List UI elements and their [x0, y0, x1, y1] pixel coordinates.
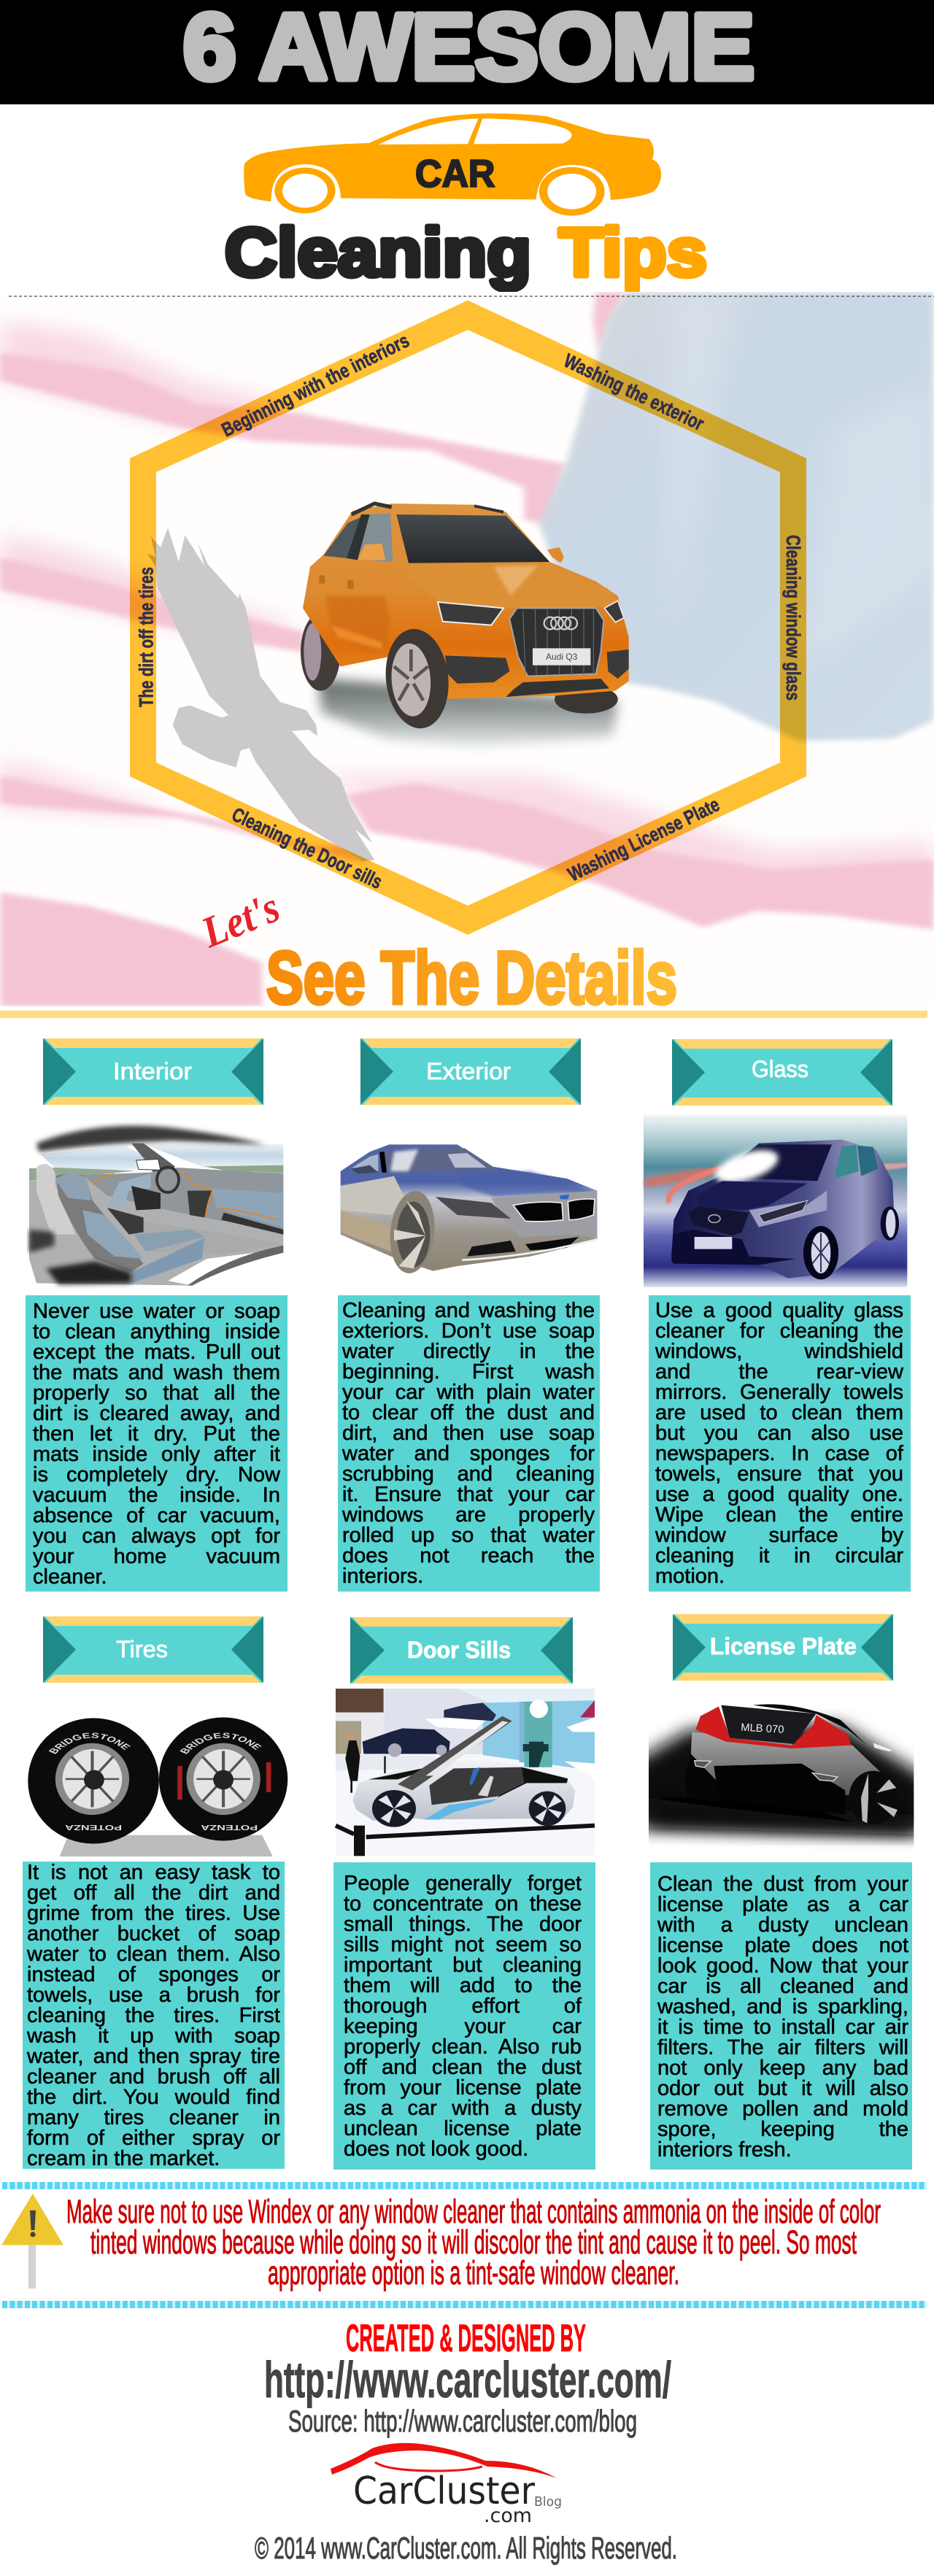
hexagon step labels: Beginning with the interiors [218, 329, 413, 441]
text: Tires tips: towels, use a brush for [27, 1983, 280, 2007]
illustration: BMW i8 at auto show [334, 1689, 595, 1856]
text: Glass tips: cleaner for cleaning the [655, 1319, 903, 1343]
illustration: Volvo rear with license plate [649, 1704, 914, 1848]
text: Exterior tips: exteriors. Don’t use soap [342, 1319, 595, 1343]
text: Interior tips: cleaner. [33, 1565, 107, 1589]
text: Interior tips: properly so that all the [33, 1381, 280, 1405]
text: Interior tips: vacuum the inside. In [33, 1484, 280, 1507]
text: Tires tips: many tires cleaner in [27, 2106, 280, 2129]
banner: Door Sills: Door Sills [407, 1637, 511, 1663]
icon: warning sign [1, 2194, 63, 2288]
illustration: two racing tires: BRIDGESTONE [180, 1732, 261, 1754]
illustration: blue Datsun sketch [642, 1115, 908, 1287]
text: Door Sills tips: small things. The door [344, 1913, 582, 1936]
text: Door Sills tips [344, 1872, 582, 2161]
illustration: orange Audi Q3: Audi Q3 [546, 652, 578, 662]
text: Interior tips: then let it dry. Put the [33, 1422, 280, 1446]
text: Glass tips: motion. [655, 1565, 725, 1588]
header band: 6 AWESOME [0, 0, 934, 104]
text: License Plate tips: filters. The air filters will [657, 2036, 908, 2059]
logo: CarCluster [331, 2443, 562, 2527]
text: License Plate tips: spore, keeping the [657, 2118, 908, 2141]
text: Door Sills tips: sills might not seem so [344, 1933, 582, 1956]
text: Exterior tips: to clear off the dust and [342, 1401, 595, 1424]
text: Door Sills tips: unclean license plate [344, 2117, 582, 2140]
illustration: two racing tires [28, 1717, 287, 1856]
text: Door Sills tips: does not look good. [344, 2137, 528, 2161]
text box: Glass [649, 1295, 911, 1592]
text: Tires tips [26, 1861, 280, 2170]
hexagon step labels: The dirt off the tires [135, 567, 157, 707]
logo: CarCluster: Blog [534, 2494, 562, 2510]
text: Interior tips: your home vacuum [33, 1545, 280, 1568]
text: Glass tips: window surface by [655, 1524, 903, 1547]
illustration: two racing tires: BRIDGESTONE [48, 1732, 131, 1754]
text: Interior tips: except the mats. Pull out [33, 1341, 280, 1364]
banner: License Plate [673, 1614, 893, 1681]
text: License Plate tips: odor out but it will also [657, 2077, 908, 2100]
panel: hero with flag, hexagon and car [0, 292, 934, 1018]
text: Exterior tips: interiors. [342, 1565, 423, 1588]
flag background [0, 292, 934, 1006]
text box: Interior [26, 1295, 287, 1592]
hexagon step labels: Washing the exterior [560, 350, 708, 435]
text: Door Sills tips: off and clean the dust [344, 2056, 582, 2079]
banner: Interior: Interior [113, 1058, 192, 1084]
dashed rule [9, 296, 934, 297]
illustration: car interior sketch [26, 1121, 283, 1289]
text box: Door Sills [333, 1862, 595, 2170]
text: Tires tips: form of either spray or [27, 2126, 280, 2150]
text: Interior tips: dirt is cleared away, and [33, 1402, 280, 1425]
text: Exterior tips: windows are properly [342, 1503, 595, 1527]
text: Tires tips: another bucket of soap [27, 1922, 280, 1946]
text: Exterior tips: does not reach the [342, 1544, 595, 1567]
text: Glass tips: use a good quality one. [655, 1483, 903, 1506]
logo: CarCluster: .com [484, 2504, 532, 2527]
text: Tires tips: cream in the market. [27, 2147, 220, 2170]
text: License Plate tips: with a dusty unclean [657, 1913, 908, 1937]
warning text [66, 2193, 881, 2291]
hexagon step labels: Washing License Plate [565, 793, 723, 886]
text: Glass tips: are used to clean them [655, 1401, 903, 1424]
text: Glass tips: cleaning it in circular [655, 1544, 903, 1567]
text: Door Sills tips: to concentrate on these [344, 1892, 582, 1916]
banner: Door Sills [350, 1617, 573, 1684]
text: Exterior tips: dirt, and then use soap [342, 1422, 595, 1445]
text: Glass tips: but you can also use [655, 1422, 903, 1445]
text: Glass tips: mirrors. Generally towels [655, 1381, 903, 1404]
text: Exterior tips: it. Ensure that your car [342, 1483, 595, 1506]
text: Door Sills tips: thorough effort of [344, 1994, 582, 2018]
text: License Plate tips: not only keep any bad [657, 2056, 908, 2080]
text: Glass tips [655, 1299, 903, 1588]
illustration: two racing tires: POTENZA [65, 1824, 122, 1832]
text box: Exterior [338, 1295, 600, 1592]
illustration: orange Audi Q3 [301, 501, 629, 750]
text: Exterior tips: beginning. First wash [342, 1360, 595, 1384]
banner: Exterior: Exterior [426, 1058, 511, 1084]
text: Door Sills tips: them will add to the [344, 1974, 582, 1997]
hexagon frame [130, 301, 806, 935]
text: Tires tips: water, and then spray tire [27, 2045, 280, 2068]
text box: License Plate [650, 1862, 912, 2170]
text: Tires tips: instead of sponges or [27, 1963, 280, 1986]
text: Exterior tips: Cleaning and washing the [342, 1299, 595, 1322]
text: Door Sills tips: keeping your car [344, 2015, 582, 2038]
text: Glass tips: Wipe clean the entire [655, 1503, 903, 1527]
text: Tires tips: water to clean them. Also [27, 1943, 280, 1966]
illustration: two racing tires: POTENZA [201, 1824, 258, 1832]
text: License Plate tips: Clean the dust from your [657, 1873, 908, 1896]
banner: Exterior [360, 1038, 581, 1105]
text box: Tires [23, 1862, 285, 2169]
text: License Plate tips: license plate as a car [657, 1893, 908, 1916]
text: Tires tips: cleaning the tires. First [27, 2004, 280, 2027]
text: Exterior tips [341, 1299, 595, 1588]
text: Glass tips: Use a good quality glass [655, 1299, 903, 1322]
text: Interior tips: mats inside only after it [33, 1443, 280, 1466]
text: License Plate tips [657, 1873, 909, 2162]
title: Cleaning Tips [225, 219, 707, 292]
text: License Plate tips: interiors fresh. [657, 2138, 792, 2162]
text: License Plate tips: it is time to install car air [657, 2016, 908, 2039]
text: Glass tips: towels, ensure that you [655, 1462, 903, 1486]
text: Interior tips [32, 1300, 280, 1589]
text: Exterior tips: rolled up so that water [342, 1524, 595, 1547]
banner: Glass [672, 1039, 892, 1106]
warning top rule [2, 2182, 927, 2189]
divider bar [0, 1011, 927, 1018]
text: Interior tips: you can always opt for [33, 1524, 280, 1548]
logo: orange car with CAR label: CAR [415, 152, 495, 195]
text: Glass tips: windows, windshield [655, 1340, 903, 1363]
text: Door Sills tips: important but cleaning [344, 1954, 582, 1977]
text: Exterior tips: water and sponges for [342, 1442, 595, 1465]
text: Door Sills tips: from your license plate [344, 2076, 582, 2099]
text: Door Sills tips: as a car with a dusty [344, 2097, 582, 2120]
text: Exterior tips: water directly in the [342, 1340, 595, 1363]
text: Tires tips: cleaner and brush off all [27, 2065, 280, 2089]
banner: Interior [43, 1038, 263, 1105]
text: Door Sills tips: People generally forget [344, 1872, 582, 1895]
text: License Plate tips: look good. Now that your [657, 1954, 908, 1978]
text: Tires tips: get off all the dirt and [27, 1881, 280, 1905]
text: License Plate tips: license plate does not [657, 1934, 908, 1957]
text: License Plate tips: remove pollen and mold [657, 2097, 908, 2121]
text: Interior tips: to clean anything inside [33, 1320, 280, 1343]
text: License Plate tips: car is all cleaned and [657, 1975, 908, 1998]
banner: Tires: Tires [116, 1636, 168, 1662]
banner: Tires [43, 1616, 263, 1683]
text: Interior tips: Never use water or soap [33, 1300, 280, 1323]
text: Interior tips: is completely dry. Now [33, 1463, 280, 1486]
text: Exterior tips: your car with plain water [342, 1381, 595, 1404]
logo: CarCluster: CarCluster [353, 2469, 536, 2513]
illustration: Volvo rear with license plate: MLB 070 [741, 1722, 784, 1736]
hexagon step labels [135, 329, 804, 893]
text: Tires tips: It is not an easy task to [27, 1861, 280, 1884]
text: Door Sills tips: properly clean. Also rub [344, 2035, 582, 2059]
hexagon step labels: Cleaning window glass [782, 535, 804, 701]
illustration: silver BMW sketch [340, 1144, 597, 1273]
text: Tires tips: the dirt. You would find [27, 2086, 280, 2109]
logo: orange car with CAR label [244, 113, 661, 216]
text: Glass tips: newspapers. In case of [655, 1442, 903, 1465]
warning bottom rule [2, 2301, 927, 2308]
text: Tires tips: wash it up with soap [27, 2024, 280, 2048]
text: Interior tips: the mats and wash them [33, 1361, 280, 1384]
text: Interior tips: absence of car vacuum, [33, 1504, 280, 1527]
text: License Plate tips: washed, and is sparkling, [657, 1995, 908, 2018]
hexagon step labels: Cleaning the Door sills [228, 803, 385, 893]
text: Glass tips: and the rear-view [655, 1360, 903, 1384]
banner: Glass: Glass [752, 1056, 808, 1082]
text: Tires tips: grime from the tires. Use [27, 1902, 280, 1925]
banner: License Plate: License Plate [710, 1633, 857, 1659]
text: Exterior tips: scrubbing and cleaning [342, 1462, 595, 1486]
eagle silhouette [147, 528, 375, 861]
